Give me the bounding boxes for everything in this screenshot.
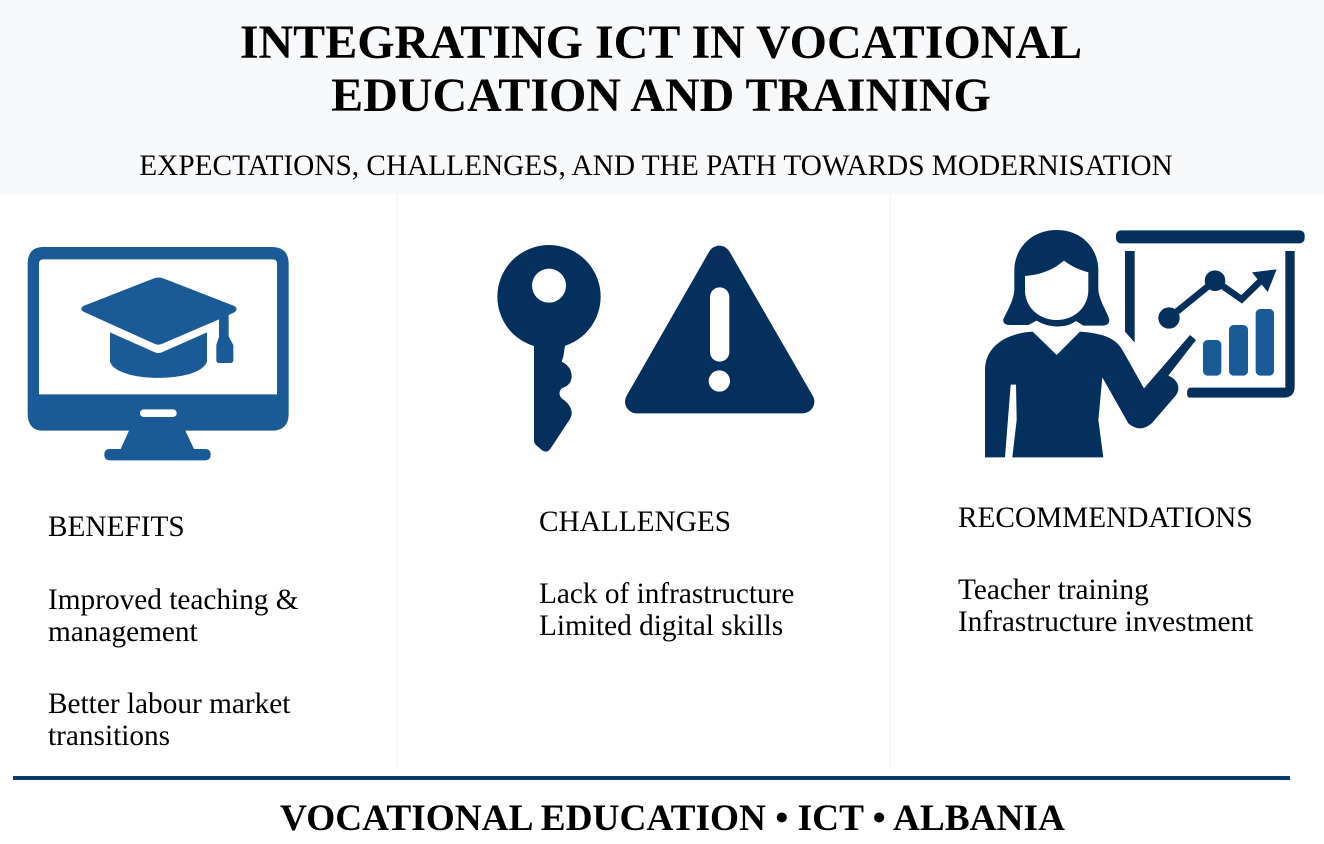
challenges list [539,578,794,642]
recommendations column [958,502,1254,638]
line chart arrow [1158,269,1277,329]
benefits heading: BENEFITS [48,511,185,543]
benefit 2 [48,688,290,752]
icon: monitor with graduation cap [28,247,289,460]
recommendations list: Teacher training [958,574,1149,606]
recommendations list: Infrastructure investment [958,606,1253,638]
benefit 1: Improved teaching & [48,584,299,616]
challenges column [539,506,794,642]
footer text: VOCATIONAL EDUCATION • ICT • ALBANIA [280,798,1065,839]
icon: key [497,245,601,452]
challenges list: Lack of infrastructure [539,578,794,610]
recommendations heading: RECOMMENDATIONS [958,502,1253,534]
benefits column [48,511,299,752]
subtitle: EXPECTATIONS, CHALLENGES, AND THE PATH TOWARDS MODERNISATION [139,150,1173,182]
benefit 2: transitions [48,720,170,752]
title: EDUCATION AND TRAINING [331,69,991,122]
bar chart [1203,309,1274,376]
hair and face [1003,230,1109,326]
title [240,16,1082,122]
icon: warning triangle [625,246,814,414]
screen top bar [1116,230,1305,243]
challenges list: Limited digital skills [539,610,783,642]
screen frame [1125,251,1295,398]
benefit 1 [48,584,299,648]
benefit 2: Better labour market [48,688,290,720]
body and pointer [985,332,1196,457]
challenges heading: CHALLENGES [539,506,731,538]
recommendations list [958,574,1254,638]
footer rule [13,776,1290,780]
benefit 1: management [48,616,198,648]
icon: teacher presenting chart [985,230,1305,458]
title: INTEGRATING ICT IN VOCATIONAL [240,16,1082,69]
header band [0,0,1324,194]
